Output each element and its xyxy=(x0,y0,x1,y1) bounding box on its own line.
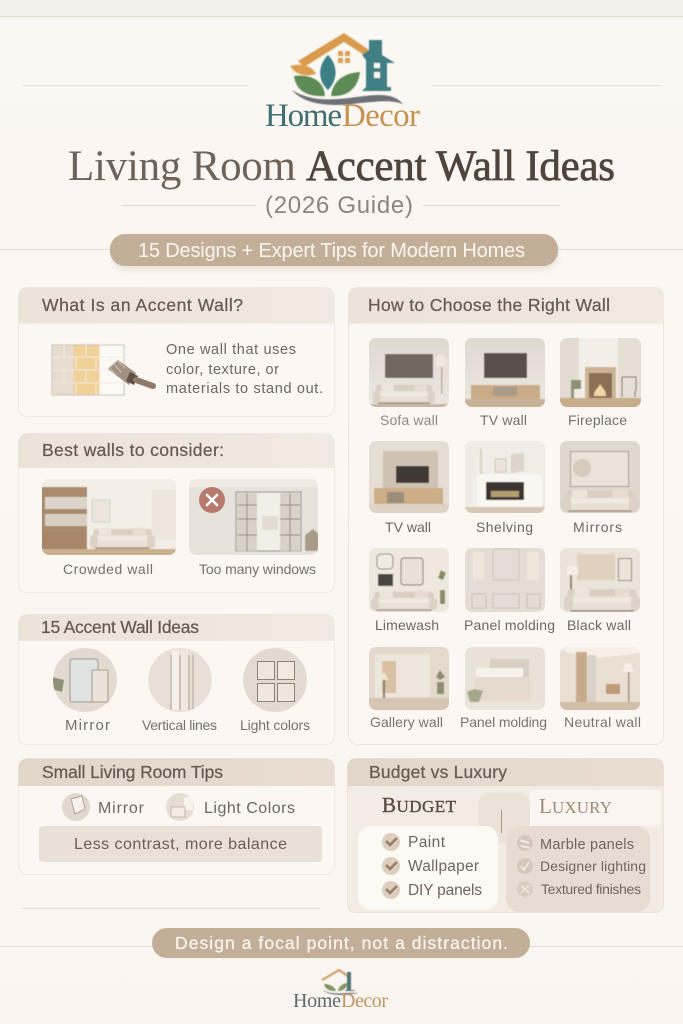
closing banner xyxy=(152,928,530,958)
item: DIY panels xyxy=(408,882,482,899)
callout: Less contrast, more balance xyxy=(74,836,287,853)
label: Panel molding xyxy=(460,714,547,730)
label: Light colors xyxy=(240,717,310,733)
icon: small house xyxy=(322,970,358,995)
label: Gallery wall xyxy=(370,714,443,730)
icon: red x xyxy=(199,487,225,513)
image: sofa wall xyxy=(367,336,451,409)
icon: chimney and house xyxy=(362,40,395,91)
panel header xyxy=(348,758,664,786)
closing banner: Design a focal point, not a distraction. xyxy=(175,933,508,953)
panel header xyxy=(18,288,334,324)
label: Limewash xyxy=(375,617,439,633)
label: Shelving xyxy=(476,519,533,535)
luxury heading: LUXURY xyxy=(539,794,612,818)
subtitle banner: 15 Designs + Expert Tips for Modern Homes xyxy=(138,240,525,262)
brand name: Decor xyxy=(342,98,420,134)
brand name xyxy=(265,98,420,134)
image: limewash xyxy=(369,548,449,612)
image: gallery wall xyxy=(369,647,449,710)
description: color, texture, or xyxy=(166,362,279,378)
logo xyxy=(290,33,403,105)
subtitle: (2026 Guide) xyxy=(265,192,413,219)
label: Vertical lines xyxy=(142,717,217,733)
item: Paint xyxy=(408,834,446,851)
callout xyxy=(39,826,322,862)
icon: check xyxy=(382,881,400,899)
windows xyxy=(374,63,380,78)
luxury list xyxy=(506,826,650,912)
tip label: Light Colors xyxy=(204,800,295,817)
icon: teal leaf xyxy=(320,55,336,90)
heading: What Is an Accent Wall? xyxy=(42,295,243,315)
image: fireplace xyxy=(558,336,643,409)
panel: how to choose xyxy=(348,288,664,744)
panel header xyxy=(348,288,664,324)
icon: window xyxy=(338,51,350,63)
icon: green leaves xyxy=(294,72,360,96)
item: Designer lighting xyxy=(540,858,646,874)
brand name: Home xyxy=(293,990,341,1012)
icon: marble xyxy=(517,835,533,851)
image: panel molding 2 xyxy=(465,647,545,710)
heading: How to Choose the Right Wall xyxy=(368,295,610,315)
icon: lighting xyxy=(517,858,533,874)
item: Wallpaper xyxy=(408,858,479,875)
label: TV wall xyxy=(480,412,527,428)
heading: Best walls to consider: xyxy=(42,440,224,460)
panel: best walls xyxy=(18,434,334,592)
icon: orange leaf xyxy=(290,65,316,75)
label: Mirrors xyxy=(573,519,622,535)
panel: what is an accent wall xyxy=(18,288,334,416)
item: Marble panels xyxy=(540,837,634,853)
panel header xyxy=(18,614,334,641)
panel: 15 ideas xyxy=(18,614,334,744)
image: black wall xyxy=(560,548,640,612)
image: mirrors xyxy=(558,439,642,515)
icon: house roof xyxy=(298,33,372,67)
label: Crowded wall xyxy=(63,561,153,577)
icon: check xyxy=(382,857,400,875)
tip label: Mirror xyxy=(98,800,145,817)
budget list xyxy=(358,826,498,910)
icon: mirror xyxy=(52,648,117,712)
icon: vertical lines xyxy=(148,648,212,712)
icon: texture xyxy=(517,881,533,897)
center tab xyxy=(478,793,530,843)
label: Panel molding xyxy=(464,617,555,633)
budget heading: BUDGET xyxy=(382,793,457,817)
heading: Small Living Room Tips xyxy=(42,762,223,782)
label: Neutral wall xyxy=(564,714,641,730)
heading: 15 Accent Wall Ideas xyxy=(41,617,199,637)
image: shelving xyxy=(463,439,547,515)
icon: light colors xyxy=(166,793,194,821)
icon: swoosh xyxy=(292,90,403,105)
description: One wall that uses xyxy=(166,342,296,358)
panel header xyxy=(18,434,334,468)
brand name: Home xyxy=(265,98,342,134)
label: Sofa wall xyxy=(380,412,438,428)
icon: frames xyxy=(243,648,307,712)
image: TV wall xyxy=(463,336,547,409)
label: Black wall xyxy=(567,617,631,633)
image: crowded wall xyxy=(40,477,178,557)
heading: Budget vs Luxury xyxy=(369,762,507,782)
title: Accent Wall Ideas xyxy=(306,143,615,190)
image: neutral wall xyxy=(560,647,640,710)
panel: budget vs luxury xyxy=(348,758,664,912)
footer logo: Decor xyxy=(341,990,388,1012)
description xyxy=(166,342,323,397)
subtitle banner xyxy=(110,234,558,270)
image: panel molding xyxy=(465,548,545,612)
item: Textured finishes xyxy=(541,881,641,897)
title: Living Room xyxy=(68,143,296,190)
image: TV wall 2 xyxy=(367,439,451,515)
label: Too many windows xyxy=(199,561,316,577)
icon: mirror xyxy=(62,793,90,821)
footer logo xyxy=(293,970,388,1012)
label: TV wall xyxy=(385,519,431,535)
panel: small living room tips xyxy=(18,758,334,874)
image: too many windows xyxy=(187,477,320,557)
panel header xyxy=(18,758,334,786)
icon: paint brush xyxy=(108,360,153,386)
label: Fireplace xyxy=(568,412,627,428)
icon: check xyxy=(382,833,400,851)
description: materials to stand out. xyxy=(166,381,323,397)
icon: brick wall xyxy=(52,345,124,395)
label: Mirror xyxy=(65,717,110,734)
title xyxy=(68,143,615,190)
right column backing xyxy=(530,790,660,826)
